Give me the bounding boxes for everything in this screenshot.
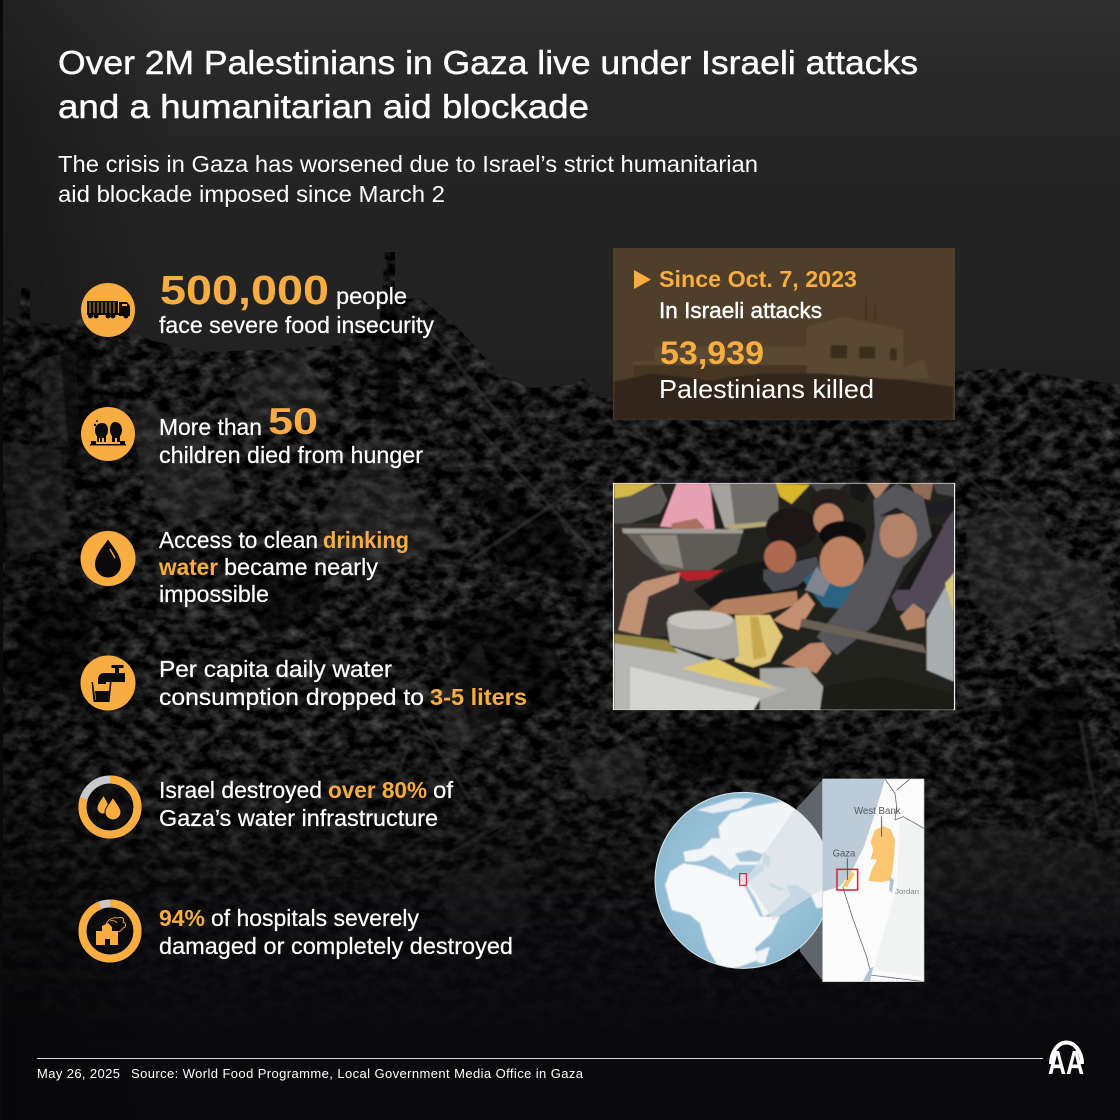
West Bank xyxy=(868,826,895,882)
icon: 80% ring with water drops xyxy=(82,780,138,834)
map labels: West Bank xyxy=(854,806,901,817)
stat: water infrastructure destroyed: over 80% xyxy=(328,777,427,803)
map labels xyxy=(833,806,919,896)
stat: water infrastructure destroyed xyxy=(159,777,454,831)
stat: water infrastructure destroyed: of xyxy=(433,777,454,803)
woman xyxy=(892,510,954,613)
children xyxy=(693,555,823,607)
connector wedge xyxy=(797,779,823,982)
title: Over 2M Palestinians in Gaza live under Israeli attacks xyxy=(58,44,918,81)
stat: clean drinking water access: Access to clean xyxy=(159,527,318,553)
photo: crowd of children and a woman reaching for food xyxy=(614,483,954,710)
map labels: Gaza xyxy=(833,849,856,860)
subtitle xyxy=(58,151,758,207)
panel: death toll since Oct. 7, 2023 xyxy=(613,248,955,420)
map labels: Jordan xyxy=(895,887,919,896)
subtitle: aid blockade imposed since March 2 xyxy=(58,181,445,207)
title: and a humanitarian aid blockade xyxy=(58,88,589,125)
icon: play triangle xyxy=(634,270,651,289)
stat: per capita daily water consumption: 3-5 liters xyxy=(430,684,527,710)
stat: more than 50 children died from hunger: More than xyxy=(159,414,262,440)
stat: per capita daily water consumption: Per capita daily water xyxy=(159,656,392,682)
stat: clean drinking water access: drinking xyxy=(323,527,409,553)
icon: children xyxy=(81,407,135,461)
location marker on globe xyxy=(740,874,746,885)
icon: tap and glass xyxy=(80,656,136,710)
stat: clean drinking water access xyxy=(158,527,409,607)
bottom pots xyxy=(760,667,823,710)
icon: food truck xyxy=(81,283,135,337)
stat: 500,000 people face severe food insecurity: 500,000 xyxy=(160,267,329,313)
centre pot and basin xyxy=(735,615,783,667)
stat: water infrastructure destroyed: Gaza’s water infrastructure xyxy=(159,805,438,831)
arms and hands xyxy=(618,573,680,635)
panel: death toll since Oct. 7, 2023: Since Oct. 7, 2023 xyxy=(659,266,857,292)
logo: Anadolu Agency: AA xyxy=(1048,1044,1084,1081)
stat: clean drinking water access: water xyxy=(158,554,218,580)
stat: clean drinking water access: became nearly xyxy=(224,554,379,580)
stat: hospitals damaged xyxy=(159,905,513,959)
title xyxy=(58,44,918,125)
stat: per capita daily water consumption xyxy=(159,656,527,710)
stat: more than 50 children died from hunger xyxy=(159,401,423,468)
stat: more than 50 children died from hunger: 50 xyxy=(268,401,318,442)
stat: hospitals damaged: damaged or completely destroyed xyxy=(159,933,513,959)
panel: death toll since Oct. 7, 2023: Palestinians killed xyxy=(659,374,874,404)
stat: water infrastructure destroyed: Israel destroyed xyxy=(159,777,322,803)
stat: more than 50 children died from hunger: children died from hunger xyxy=(159,442,423,468)
icon: 94% ring with damaged hospital xyxy=(82,904,138,958)
stat: 500,000 people face severe food insecurity xyxy=(159,267,434,338)
stat: hospitals damaged: 94% xyxy=(159,905,205,931)
subtitle: The crisis in Gaza has worsened due to Israel’s strict humanitarian xyxy=(58,151,758,177)
panel: death toll since Oct. 7, 2023: In Israeli attacks xyxy=(659,298,822,323)
panel: death toll since Oct. 7, 2023: 53,939 xyxy=(660,335,764,371)
globe xyxy=(654,792,822,969)
Gaza Strip xyxy=(842,872,855,887)
footer: date and source xyxy=(37,1058,1043,1081)
stat: clean drinking water access: impossible xyxy=(159,581,269,607)
right pot xyxy=(927,572,954,682)
map: globe and Gaza locator inset xyxy=(655,779,924,982)
stat: per capita daily water consumption: consumption dropped to xyxy=(159,684,424,710)
footer: date and source: May 26, 2025 xyxy=(37,1066,120,1081)
stat: hospitals damaged: of hospitals severely xyxy=(211,905,419,931)
stat: 500,000 people face severe food insecurity: face severe food insecurity xyxy=(159,312,434,338)
footer: date and source: Source: World Food Programme, Local Government Media Office in Gaza xyxy=(131,1066,584,1081)
stat: 500,000 people face severe food insecurity: people xyxy=(336,283,407,309)
icon: water drop xyxy=(80,531,136,586)
inset map xyxy=(823,779,924,982)
